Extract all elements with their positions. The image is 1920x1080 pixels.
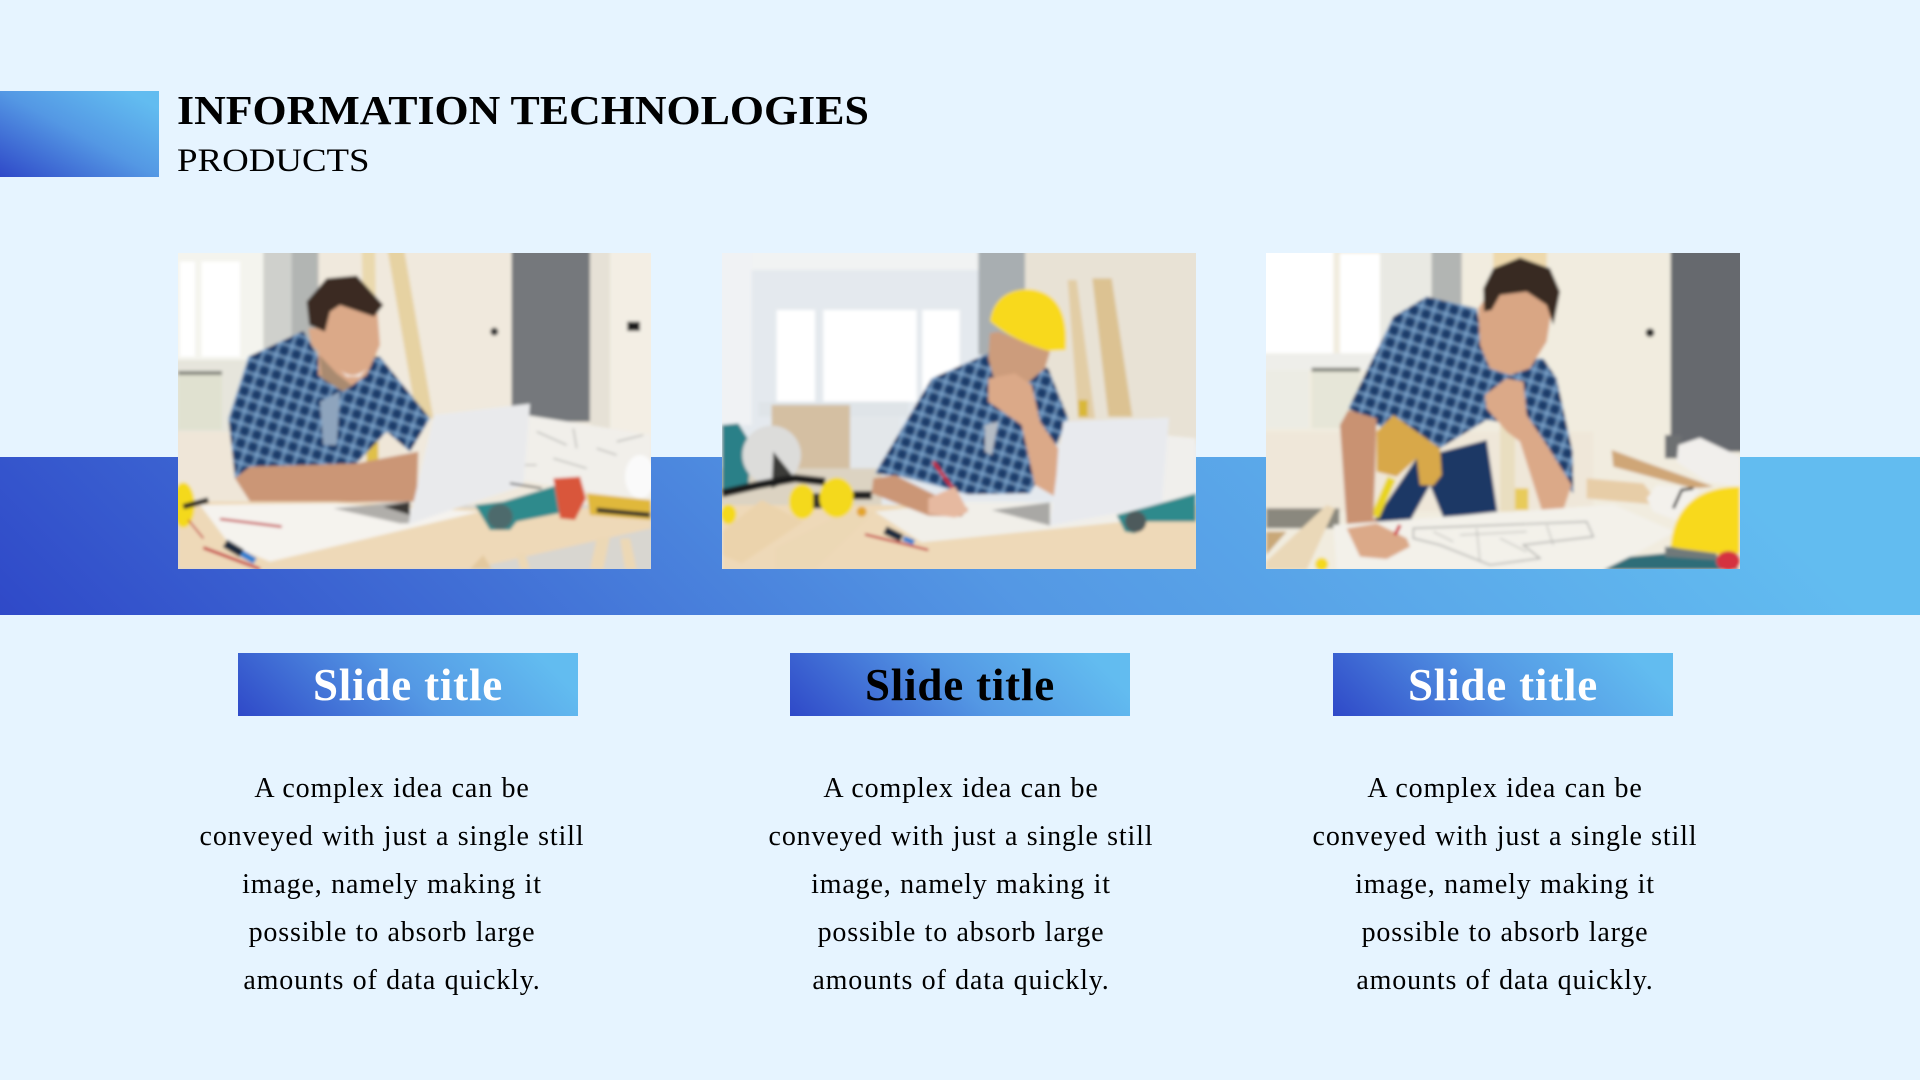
text block: column 2: A complex idea can be <box>823 773 1099 804</box>
text block: column 3: A complex idea can be <box>1367 773 1643 804</box>
text block: column 2: image, namely making it <box>811 869 1111 900</box>
text block: column 3 <box>1313 773 1697 996</box>
subtitle: PRODUCTS <box>177 143 370 179</box>
photo: worker reviewing blueprints <box>1266 253 1740 569</box>
text block: column 3: amounts of data quickly. <box>1356 965 1654 996</box>
slide title text: Slide title <box>1408 660 1598 710</box>
text block: column 3: image, namely making it <box>1355 869 1655 900</box>
panel: column 1 title <box>238 653 578 716</box>
text block: column 1: amounts of data quickly. <box>243 965 541 996</box>
header accent block <box>0 91 159 177</box>
panel: column 3 title <box>1333 653 1673 716</box>
text block: column 1: possible to absorb large <box>249 917 535 948</box>
text block: column 2: conveyed with just a single still <box>769 821 1153 852</box>
text block: column 3: possible to absorb large <box>1362 917 1648 948</box>
text block: column 1 <box>200 773 584 996</box>
text block: column 1: image, namely making it <box>242 869 542 900</box>
text block: column 1: conveyed with just a single still <box>200 821 584 852</box>
text block: column 2 <box>769 773 1153 996</box>
slide title text: Slide title <box>865 660 1055 710</box>
photo: worker in hard hat writing <box>722 253 1196 569</box>
text block: column 2: possible to absorb large <box>818 917 1104 948</box>
text block: column 3: conveyed with just a single still <box>1313 821 1697 852</box>
panel: column 2 title <box>790 653 1130 716</box>
text block: column 1: A complex idea can be <box>254 773 530 804</box>
text block: column 2: amounts of data quickly. <box>812 965 1110 996</box>
slide title text: Slide title <box>313 660 503 710</box>
title: INFORMATION TECHNOLOGIES <box>177 87 869 133</box>
photo: smiling worker at laptop <box>178 253 651 569</box>
gradient band behind photos <box>0 457 1920 615</box>
